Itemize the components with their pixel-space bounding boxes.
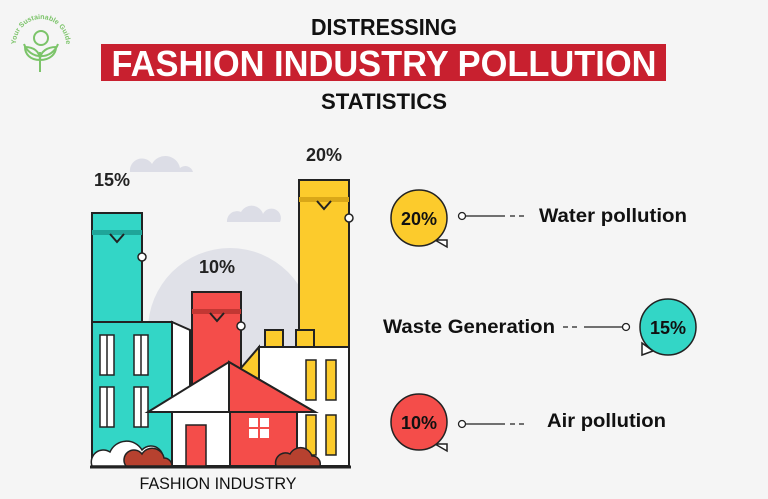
tower labels: 15% <box>94 170 130 190</box>
tower labels: 10% <box>199 257 235 277</box>
yellow tower <box>299 180 349 466</box>
title: STATISTICS <box>321 89 447 114</box>
item: air pollution: 10% <box>401 413 437 433</box>
item: waste generation <box>383 299 696 355</box>
item: air pollution: Air pollution <box>547 411 666 432</box>
bushes <box>91 441 163 466</box>
logo <box>11 14 71 72</box>
tower labels <box>94 145 342 277</box>
item: waste generation: Waste Generation <box>383 317 555 338</box>
right building <box>241 347 259 466</box>
title: FASHION INDUSTRY POLLUTION <box>112 43 656 84</box>
item: waste generation: 15% <box>650 318 686 338</box>
title: DISTRESSING <box>311 14 457 40</box>
teal tower <box>92 213 142 466</box>
teal building <box>92 322 172 466</box>
logo: Your Sustainable Guide <box>11 14 71 44</box>
caption: fashion industry: FASHION INDUSTRY <box>140 474 296 493</box>
item: water pollution: Water pollution <box>539 206 687 227</box>
title banner <box>101 44 666 81</box>
item: water pollution <box>391 190 687 247</box>
tower labels: 20% <box>306 145 342 165</box>
title <box>101 14 666 114</box>
illustration: fashion industry city <box>90 156 353 467</box>
item: air pollution <box>391 394 666 451</box>
red tower <box>192 292 241 466</box>
item: water pollution: 20% <box>401 209 437 229</box>
house <box>148 362 315 412</box>
